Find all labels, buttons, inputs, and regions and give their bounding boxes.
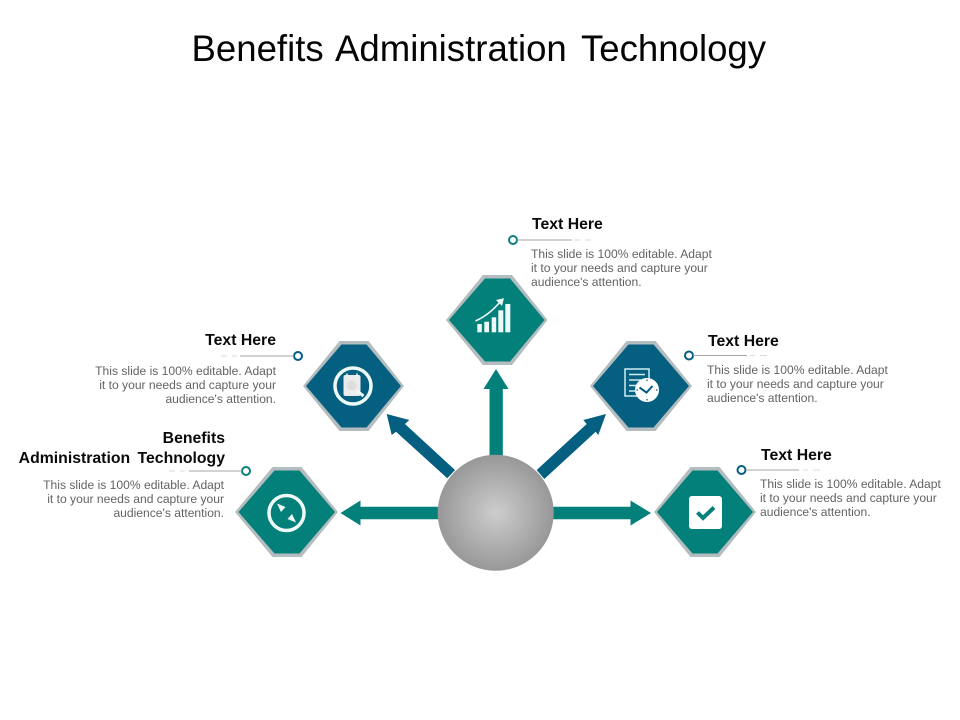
central sphere xyxy=(438,455,554,571)
panel: lower right item xyxy=(654,447,941,557)
description: audience's attention. xyxy=(760,505,871,519)
description: it to your needs and capture your xyxy=(99,378,276,392)
icon: compass xyxy=(269,496,304,530)
icon: calendar in ring xyxy=(335,368,371,404)
connector line xyxy=(240,355,294,357)
hexagon: upper left xyxy=(303,341,404,431)
icon: rising bar chart xyxy=(476,298,510,332)
title: Administration xyxy=(335,28,567,69)
heading: Text Here xyxy=(532,216,603,233)
connector line xyxy=(693,354,747,356)
hexagon: upper right xyxy=(590,341,692,431)
description: it to your needs and capture your xyxy=(707,377,884,391)
arrow: to top hexagon xyxy=(484,369,508,460)
icon: document with clock xyxy=(625,369,659,402)
connector dot xyxy=(685,352,693,360)
description: it to your needs and capture your xyxy=(47,492,224,506)
title: Benefits xyxy=(192,28,324,69)
connector dot xyxy=(242,467,250,475)
icon: checkbox xyxy=(689,496,722,529)
heading: Administration Technology xyxy=(19,450,225,467)
panel: top item xyxy=(446,216,712,365)
description: it to your needs and capture your xyxy=(531,261,708,275)
arrow: to upper right hexagon xyxy=(537,414,606,479)
connector line xyxy=(517,239,572,241)
description: audience's attention. xyxy=(531,275,642,289)
description: This slide is 100% editable. Adapt xyxy=(95,364,277,378)
description: This slide is 100% editable. Adapt xyxy=(43,478,225,492)
connector dot xyxy=(738,466,746,474)
hexagon: lower right xyxy=(654,467,756,557)
title: Technology xyxy=(581,28,767,69)
hexagon: lower left xyxy=(235,467,338,557)
hexagon: top xyxy=(446,275,548,365)
connector line xyxy=(746,469,799,471)
panel: lower left item xyxy=(19,430,338,557)
connector dot xyxy=(509,236,517,244)
description: audience's attention. xyxy=(165,392,276,406)
description: audience's attention. xyxy=(113,506,224,520)
heading: Benefits xyxy=(163,430,225,447)
panel: upper left item xyxy=(95,332,404,431)
description: it to your needs and capture your xyxy=(760,491,937,505)
heading: Text Here xyxy=(205,332,276,349)
arrow: to upper left hexagon xyxy=(387,414,455,478)
heading: Text Here xyxy=(708,333,779,350)
heading: Text Here xyxy=(761,447,832,464)
arrow: to lower right hexagon xyxy=(545,500,651,526)
connector dot xyxy=(294,352,302,360)
panel: upper right item xyxy=(590,333,888,431)
description: This slide is 100% editable. Adapt xyxy=(531,247,712,261)
arrow: to lower left hexagon xyxy=(340,500,445,526)
description: This slide is 100% editable. Adapt xyxy=(760,477,941,491)
description: audience's attention. xyxy=(707,391,818,405)
connector line xyxy=(189,470,242,472)
description: This slide is 100% editable. Adapt xyxy=(707,363,888,377)
